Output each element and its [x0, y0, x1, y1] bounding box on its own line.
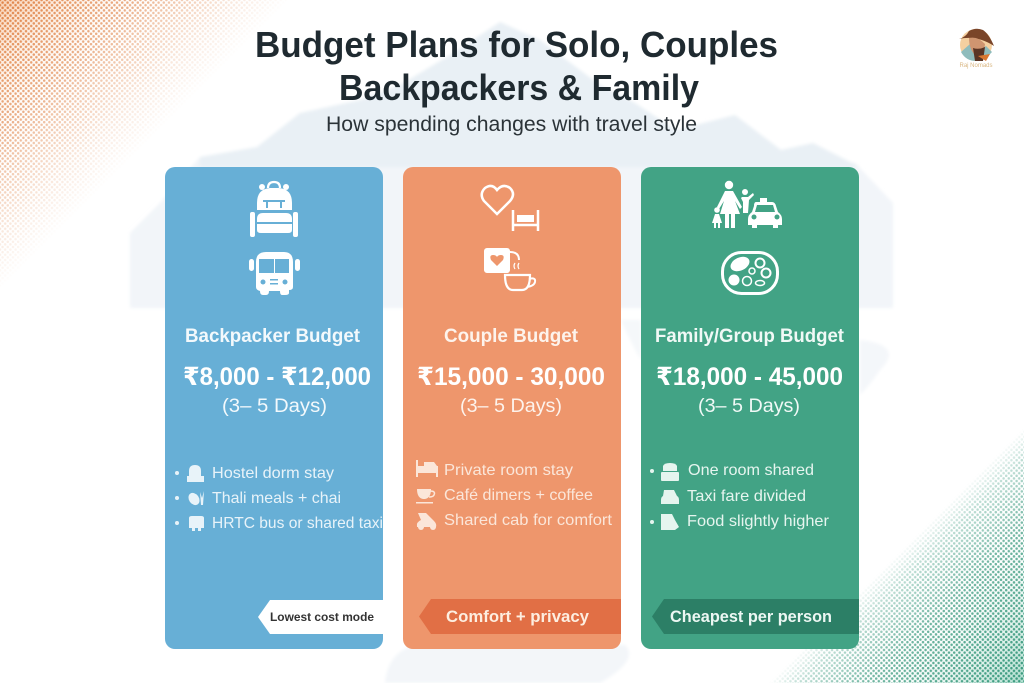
- icon: bus: [249, 252, 300, 295]
- title: Budget Plans for Solo, Couples: [255, 24, 778, 65]
- price: ₹18,000 - 45,000: [656, 363, 843, 391]
- card background: [403, 167, 621, 649]
- heading: Family/Group Budget: [655, 326, 845, 347]
- halftone corner: bottom right: [774, 431, 1024, 683]
- list item: taxi fare: Taxi fare divided: [687, 488, 806, 505]
- tag: cheapest per person: Cheapest per person: [670, 607, 832, 626]
- title: [255, 24, 778, 108]
- logo: traveller avatar: [959, 29, 994, 69]
- list item: room shared: One room shared: [688, 462, 814, 479]
- list item: cafe: Café dimers + coffee: [444, 487, 593, 504]
- icon: food platter: [722, 252, 778, 294]
- list item: meals: Thali meals + chai: [212, 490, 341, 507]
- icon: heart card and cup: [484, 248, 535, 290]
- tag: comfort + privacy: Comfort + privacy: [446, 607, 590, 626]
- logo: traveller avatar: Raj Nomads: [959, 63, 993, 69]
- icon: heart and bed: [482, 186, 538, 231]
- title: Backpackers & Family: [339, 67, 699, 108]
- price: ₹15,000 - 30,000: [417, 363, 605, 391]
- card background: [641, 167, 859, 649]
- panel: couple budget: [403, 167, 621, 649]
- duration: (3– 5 Days): [222, 396, 327, 417]
- tag: cheapest per person: [652, 599, 859, 634]
- card background: [165, 167, 383, 649]
- icon: family and taxi: [712, 181, 782, 228]
- list item: room shared: [650, 462, 814, 481]
- background mountains: [130, 22, 893, 683]
- halftone corner: top left: [0, 0, 276, 276]
- subtitle: How spending changes with travel style: [326, 113, 697, 136]
- list item: food: Food slightly higher: [687, 513, 830, 530]
- icon: backpack: [250, 182, 298, 237]
- tag: comfort + privacy: [419, 599, 621, 634]
- tag: lowest cost mode: Lowest cost mode: [270, 610, 374, 624]
- heading: Backpacker Budget: [185, 326, 361, 347]
- tag: lowest cost mode: [258, 600, 383, 634]
- price: ₹8,000 - ₹12,000: [183, 363, 371, 391]
- list item: bus: HRTC bus or shared taxi: [212, 515, 383, 532]
- duration: (3– 5 Days): [698, 396, 800, 417]
- list item: hostel: Hostel dorm stay: [212, 465, 334, 482]
- list item: room: Private room stay: [444, 462, 573, 479]
- list item: cab: Shared cab for comfort: [444, 512, 613, 529]
- panel: family/group budget: [641, 167, 859, 649]
- heading: Couple Budget: [444, 326, 579, 347]
- duration: (3– 5 Days): [460, 396, 562, 417]
- panel: backpacker budget: [165, 167, 383, 649]
